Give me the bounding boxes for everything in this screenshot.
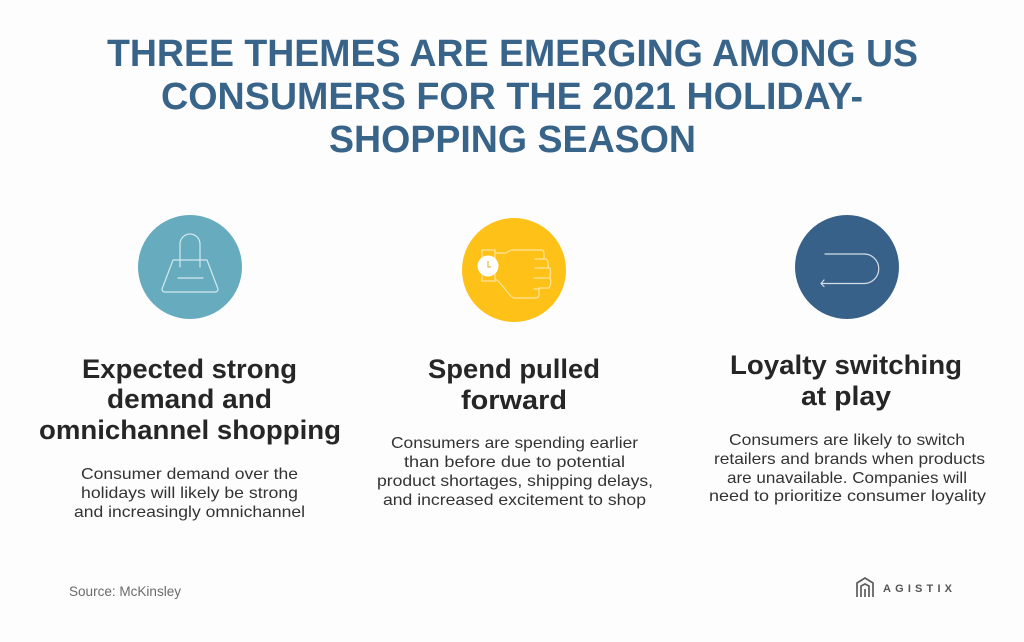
heading: spend pulled forward: Spend pulled: [428, 354, 600, 384]
heading: loyalty switching: at play: [801, 381, 891, 411]
heading: strong demand: Expected strong: [82, 354, 297, 384]
text: spend pulled forward description: product shortages, shipping delays,: [377, 473, 653, 490]
text: loyalty switching description: need to prioritize consumer loyality: [709, 488, 986, 505]
title: [107, 33, 918, 161]
text: strong demand description: Consumer demand over the: [81, 466, 298, 483]
text: loyalty switching description: are unavailable. Companies will: [727, 470, 967, 487]
icon: return arrow: [795, 215, 899, 319]
heading: spend pulled forward: [428, 354, 600, 415]
title: THREE THEMES ARE EMERGING AMONG US: [107, 33, 918, 75]
heading: loyalty switching: [730, 350, 962, 411]
text: spend pulled forward description: than before due to potential: [404, 454, 625, 471]
text: strong demand description: [74, 466, 305, 521]
source note: Source: McKinsley: [69, 584, 181, 599]
text: loyalty switching description: retailers and brands when products: [714, 451, 985, 468]
text: spend pulled forward description: [377, 435, 653, 509]
heading: loyalty switching: Loyalty switching: [730, 350, 962, 380]
heading: strong demand: demand and: [107, 384, 272, 414]
logo: Agistix: AGISTIX: [883, 583, 953, 595]
text: strong demand description: and increasingly omnichannel: [74, 504, 305, 521]
panel: loyalty switching: [709, 215, 986, 505]
panel: strong demand: [39, 215, 341, 521]
logo: Agistix: [857, 578, 953, 597]
panel: spend pulled forward: [377, 218, 653, 509]
heading: strong demand: omnichannel shopping: [39, 415, 341, 445]
heading: strong demand: [39, 354, 341, 445]
icon: shopping bag: [138, 215, 242, 319]
text: strong demand description: holidays will likely be strong: [81, 485, 298, 502]
heading: spend pulled forward: forward: [461, 385, 567, 415]
title: SHOPPING SEASON: [329, 119, 696, 161]
icon: wristwatch on hand: [462, 218, 566, 322]
text: loyalty switching description: Consumers are likely to switch: [729, 432, 965, 449]
text: loyalty switching description: [709, 432, 986, 505]
text: spend pulled forward description: Consumers are spending earlier: [391, 435, 639, 452]
text: spend pulled forward description: and increased excitement to shop: [383, 492, 646, 509]
title: CONSUMERS FOR THE 2021 HOLIDAY-: [161, 76, 863, 118]
